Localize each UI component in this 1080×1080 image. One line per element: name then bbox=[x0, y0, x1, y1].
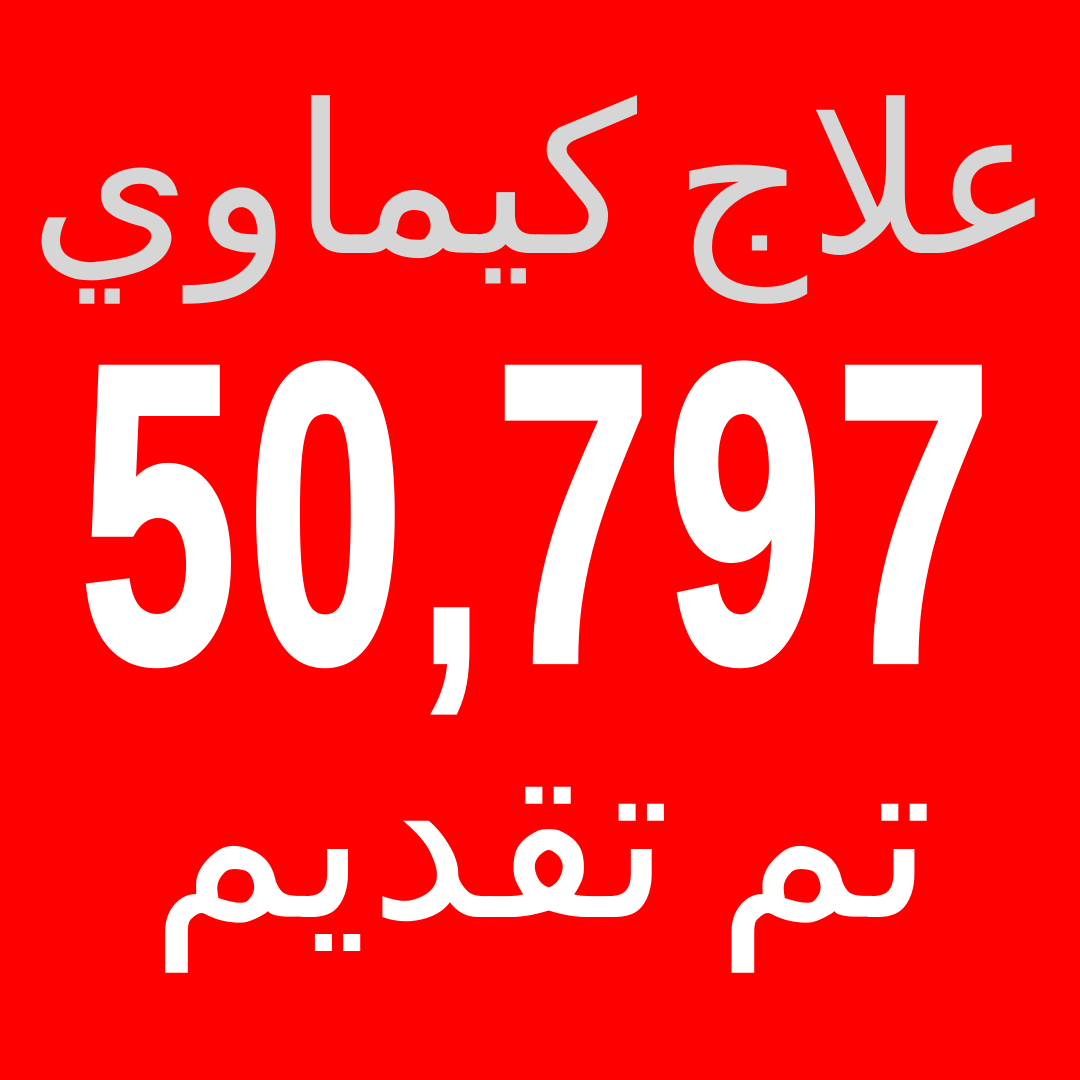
big number: 0 bbox=[248, 278, 404, 751]
big number: 5 bbox=[80, 278, 236, 751]
big number: 7 bbox=[836, 278, 991, 751]
big number: 9 bbox=[667, 278, 823, 751]
heading: chemotherapy: علاج كيماوي bbox=[28, 61, 1056, 304]
caption: provided: تم تقديم bbox=[149, 702, 935, 973]
big number bbox=[80, 278, 991, 751]
big number: 7 bbox=[495, 278, 651, 751]
big number: , bbox=[421, 364, 481, 730]
